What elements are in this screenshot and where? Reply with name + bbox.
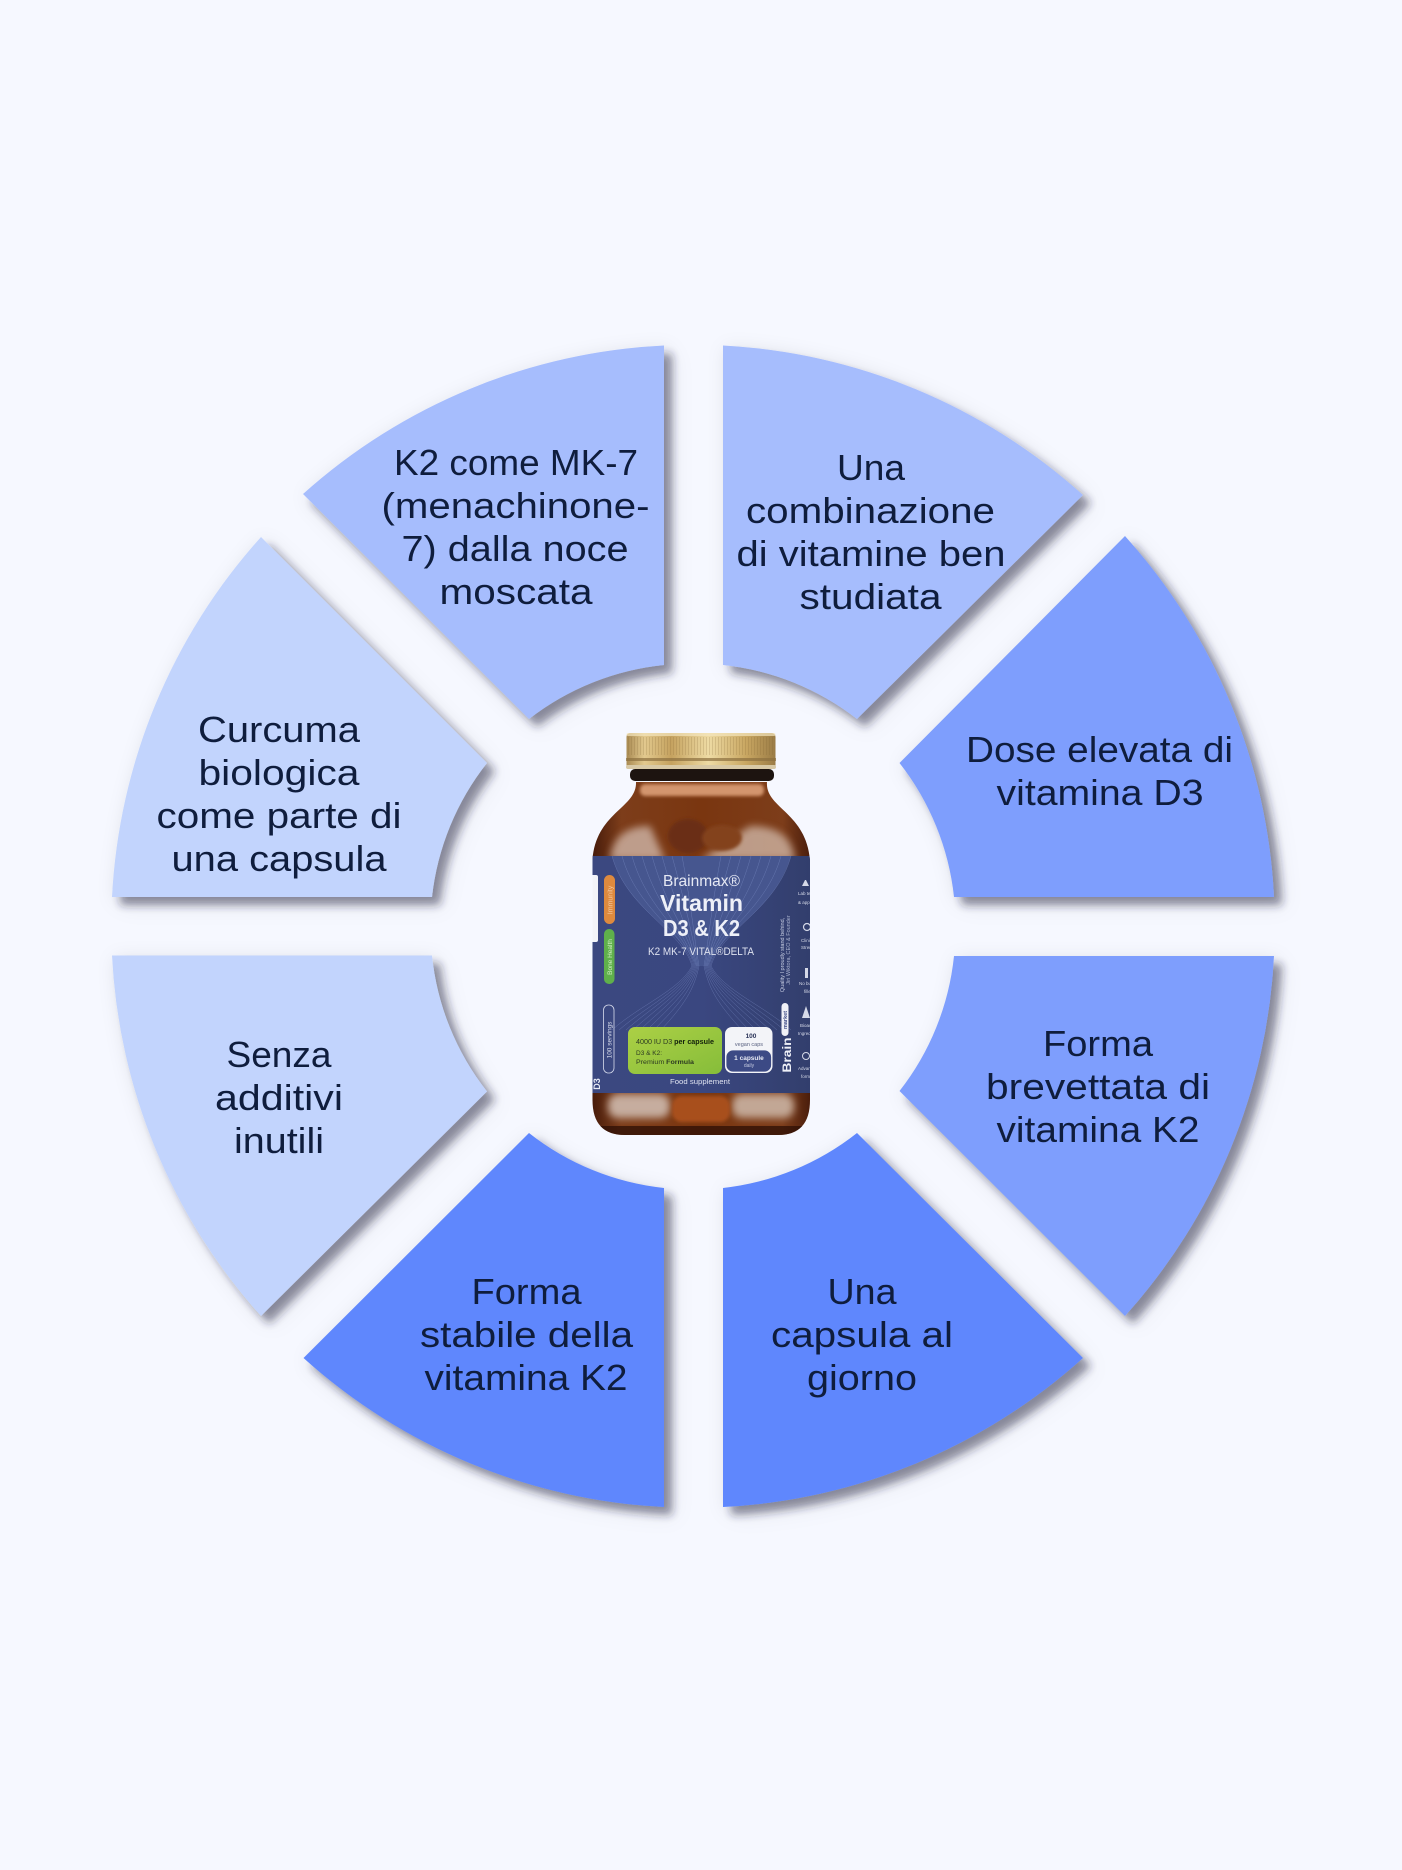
wedge label: vitamina K2: [424, 1357, 628, 1398]
left side tags: Immunity: [608, 885, 614, 914]
wedge label: inutili: [234, 1120, 324, 1161]
wedge label: combinazione: [746, 490, 995, 531]
wedge label: stabile della: [420, 1314, 634, 1355]
wedge label: 7) dalla noce: [402, 528, 628, 569]
right side icons and claims: Lab tested: [798, 891, 820, 896]
panel: top left wedge, K2 come MK-7: [303, 346, 664, 719]
dose box: [628, 1027, 722, 1074]
wedge label: brevettata di: [986, 1066, 1210, 1107]
right side icons and claims: Ingredients: [798, 1031, 821, 1036]
right side icons and claims: [798, 880, 810, 1078]
wedge label: Senza: [226, 1034, 333, 1075]
wedge label: [382, 442, 650, 612]
wedge label: Una: [828, 1271, 898, 1312]
product: supplement bottle: [590, 733, 822, 1138]
capsule count box: daily: [744, 1063, 755, 1069]
wedge shape: [723, 1133, 1083, 1507]
wedge label: studiata: [800, 576, 943, 617]
bottle glass: [590, 780, 814, 1138]
left side tags: [592, 875, 615, 1090]
panel: bottom right wedge, una capsula al giorno: [723, 1133, 1083, 1507]
founder quote: [780, 915, 792, 992]
panel: left upper wedge, curcuma biologica: [112, 537, 487, 897]
gold cap: [626, 733, 776, 769]
dose box: Premium Formula: [636, 1059, 694, 1066]
infographic: product feature wheel: [112, 345, 1289, 1522]
wedge label: capsula al: [771, 1314, 953, 1355]
wedge label: [966, 729, 1233, 813]
right side icons and claims: No bulking: [799, 981, 821, 986]
food supplement note: Food supplement: [670, 1077, 731, 1086]
wedge label: moscata: [440, 571, 594, 612]
wedge label: Una: [837, 447, 906, 488]
founder quote: Quality I proudly stand behind,: [780, 917, 786, 992]
label light hourglass: [612, 856, 791, 966]
panel: right lower wedge, forma brevettata: [900, 956, 1274, 1316]
bottle label: [590, 856, 822, 1093]
product title: D3 & K2: [663, 915, 740, 941]
founder quote: Jiri Wiktora, CEO & Founder: [786, 915, 792, 985]
wedge shape: [900, 536, 1274, 897]
wedge shape: [900, 956, 1274, 1316]
right side icons and claims: Bioactive: [800, 1023, 819, 1028]
wedge label: [215, 1034, 343, 1161]
wedge label: [156, 709, 402, 879]
wedge label: [420, 1271, 634, 1398]
wedge label: Forma: [1043, 1023, 1154, 1064]
wedge label: additivi: [215, 1077, 343, 1118]
vertical brand mark: market: [783, 1011, 789, 1029]
brand name: Brainmax®: [663, 873, 740, 890]
product title: Vitamin: [660, 890, 743, 916]
capsule count box: vegan caps: [735, 1042, 763, 1048]
capsule count box: 100: [746, 1033, 757, 1040]
neck ring: [630, 769, 774, 781]
dose box: D3 & K2:: [636, 1050, 662, 1057]
capsule count box: 1 capsule: [734, 1055, 764, 1062]
wedge label: (menachinone-: [382, 485, 650, 526]
wedge shape: [112, 956, 487, 1316]
wedge label: una capsula: [172, 838, 388, 879]
wedge label: vitamina K2: [996, 1109, 1200, 1150]
wedge label: Forma: [472, 1271, 583, 1312]
wedge label: Curcuma: [198, 709, 361, 750]
label wave pattern: [612, 856, 791, 1030]
panel: top right wedge, combinazione di vitamine: [723, 346, 1083, 719]
capsule count box: [725, 1027, 772, 1073]
left side tags: D3: [592, 1078, 602, 1090]
right side icons and claims: fillers: [804, 989, 815, 994]
right side icons and claims: Strength: [801, 945, 819, 950]
vertical brand mark: Brain: [780, 1038, 794, 1072]
wedge label: come parte di: [156, 795, 402, 836]
panel: left lower wedge, senza additivi: [112, 956, 487, 1316]
wedge label: di vitamine ben: [736, 533, 1006, 574]
wedge label: [986, 1023, 1210, 1150]
right side icons and claims: & approved: [798, 900, 822, 905]
wedge label: giorno: [807, 1357, 917, 1398]
dose box: 4000 IU D3 per capsule: [636, 1039, 714, 1046]
product title: [660, 894, 742, 936]
panel: bottom left wedge, forma stabile: [304, 1133, 664, 1507]
product subtitle: K2 MK-7 VITAL®DELTA: [648, 946, 755, 958]
wedge shape: [112, 537, 487, 897]
left side tags: 100 servings: [606, 1021, 614, 1058]
wedge label: biologica: [198, 752, 361, 793]
wedge shape: [723, 346, 1083, 719]
vertical brand mark: [782, 1003, 791, 1072]
wedge shape: [304, 1133, 664, 1507]
wedge shape: [303, 346, 664, 719]
right side icons and claims: formula: [801, 1074, 817, 1079]
wedge label: [771, 1271, 953, 1398]
right side icons and claims: Clinical: [801, 938, 816, 943]
wedge label: vitamina D3: [996, 772, 1204, 813]
left side tags: Bone Health: [607, 939, 614, 975]
wedge label: K2 come MK-7: [394, 442, 638, 483]
wedge label: Dose elevata di: [966, 729, 1233, 770]
wedge label: [736, 447, 1006, 617]
panel: right upper wedge, dose elevata: [900, 536, 1274, 897]
right side icons and claims: Advanced: [798, 1066, 819, 1071]
